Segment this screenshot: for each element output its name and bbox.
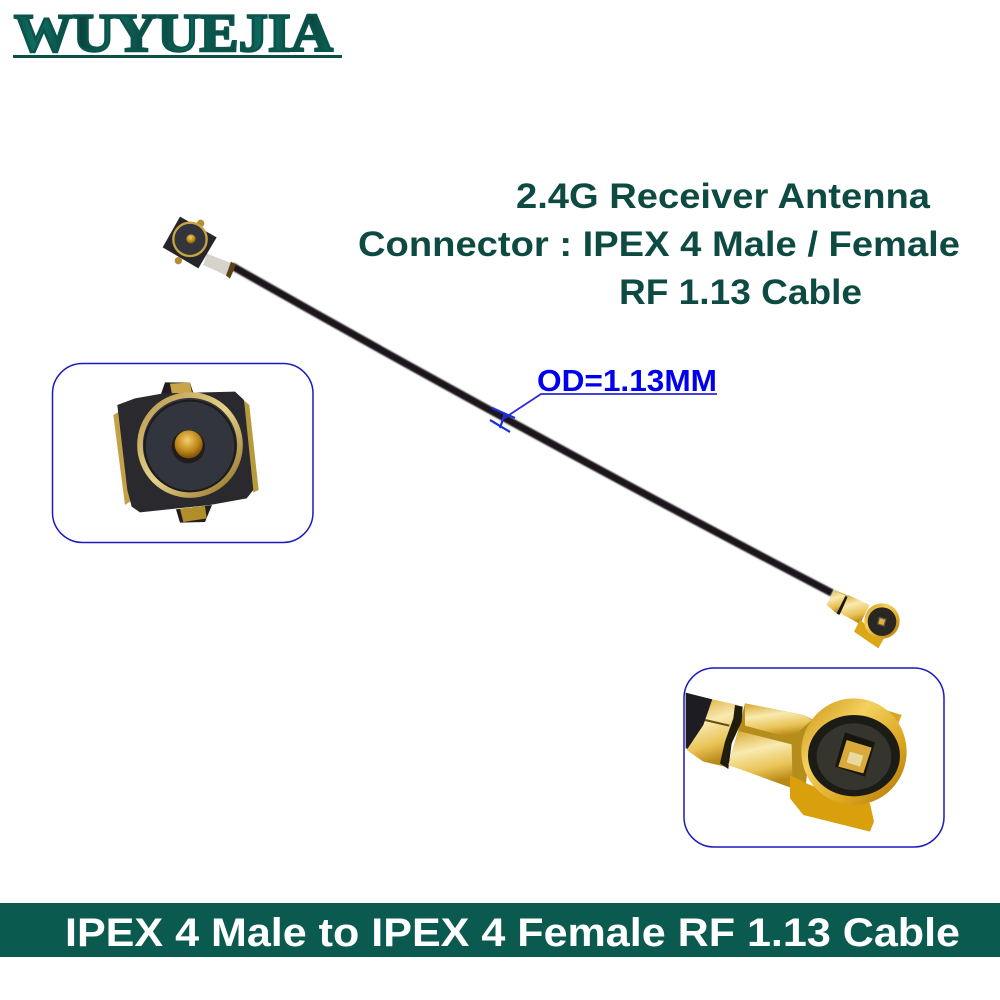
center contact [838,740,872,773]
bottom title banner [0,903,1000,957]
banner text: IPEX 4 Male to IPEX 4 Female RF 1.13 Cable [65,911,960,955]
panel frame [684,668,944,847]
black cable [686,693,712,750]
logo underline [13,55,342,58]
dark insulator [808,715,900,796]
upper crimp [745,703,812,738]
cable diameter callout [490,363,717,432]
brand name: WUYUEJIA [14,3,333,63]
gold round shell [864,603,900,639]
dark insulator [868,607,896,636]
right contact [243,399,259,493]
sleeve seam [705,720,729,726]
diameter marker [490,408,515,432]
icon: male connector [113,382,259,523]
top right tab [880,708,902,723]
male connector, small [163,217,236,279]
ring [140,395,240,495]
center contact [878,617,886,626]
bottom tabs [790,775,874,832]
crimp backing [728,703,813,792]
cable end collar [226,262,236,279]
silver cable stripped section [203,253,232,276]
heading line 3: RF 1.13 Cable [619,273,862,312]
panel frame [52,364,313,542]
connector body [163,217,217,268]
pin halo [172,430,205,463]
female connector, small [827,590,900,648]
rear sleeve [687,699,738,767]
icon: female connector [686,693,907,832]
heading line 2: Connector : IPEX 4 Male / Female [358,225,960,264]
crimp sleeve [827,590,846,614]
panel: female connector detail [684,668,944,847]
bottom tab [854,620,884,648]
contact recess [835,732,875,777]
black band [837,596,848,615]
leader line [503,394,717,419]
brand logo [13,3,342,63]
bottom tab [176,505,212,523]
black body [117,392,253,512]
gold shell [801,698,907,805]
gold ring [173,223,207,256]
side pins [175,257,182,264]
heading text [358,177,960,312]
top tab [161,382,194,395]
gold pin [175,430,203,458]
banner background [0,903,1000,957]
heading line 1: 2.4G Receiver Antenna [516,177,931,216]
lower crimp [728,731,793,788]
diameter label: OD=1.13MM [537,363,717,398]
insulator centre [817,723,891,790]
ring inner edge [145,401,235,491]
panel: male connector detail [52,364,313,542]
crimp barrel [841,595,869,624]
center pin [186,234,196,244]
left contact [113,411,132,505]
black band [720,705,743,769]
crimp backing [827,590,869,624]
main cable [232,266,832,593]
